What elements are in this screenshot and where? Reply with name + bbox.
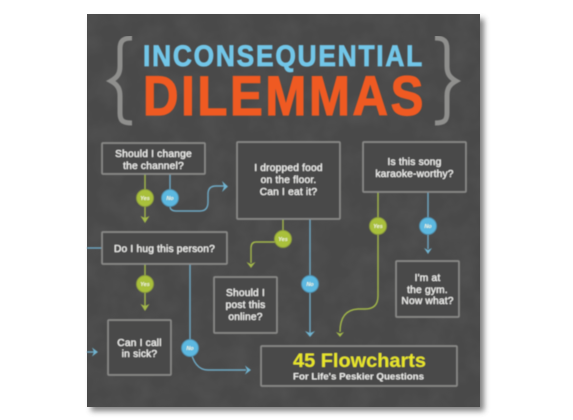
box: 45 flowcharts: For Life's Peskier Questions (293, 372, 424, 382)
box: dropped food (237, 142, 340, 219)
box: change the channel: Should I change (115, 149, 192, 160)
badge: yes, channel: Yes (140, 196, 150, 202)
drop shadow (91, 19, 484, 411)
arrow: dropped no to flowcharts (305, 219, 315, 337)
arrow: incoming to call in sick (87, 348, 98, 356)
box: dropped food: I dropped food (254, 163, 323, 174)
badge: no, channel (162, 190, 178, 206)
arrow: channel yes to hug (140, 174, 150, 223)
badge: no, dropped food: No (306, 282, 314, 288)
left curly brace (111, 38, 132, 123)
arrow: incoming to hug (87, 247, 102, 249)
box: dropped food: on the floor. (261, 175, 316, 186)
flowchart (87, 142, 466, 386)
arrow: hug no to flowcharts (190, 264, 251, 374)
badge: yes, dropped food (274, 230, 292, 248)
badge: yes, karaoke: Yes (373, 224, 383, 230)
box: change the channel (102, 143, 205, 174)
box: change the channel: the channel? (123, 161, 184, 172)
right curly brace (435, 38, 456, 123)
badge: yes, karaoke (370, 218, 386, 234)
title: inconsequential: INCONSEQUENTIAL (143, 40, 424, 73)
box: gym: Now what? (401, 296, 454, 307)
box: post online: Should I (226, 288, 265, 299)
title block (111, 38, 456, 127)
box: post online (214, 277, 277, 333)
chalkboard background (87, 14, 480, 407)
box: call in sick: in sick? (122, 349, 157, 360)
box: post online: online? (228, 312, 263, 323)
box: call in sick: Can I call (117, 338, 162, 349)
badge: no, karaoke: No (424, 224, 432, 230)
arrow: channel no to dropped food (170, 174, 228, 211)
box: karaoke (363, 142, 466, 192)
title: dilemmas: DILEMMAS (143, 64, 426, 127)
badge: no, channel: No (166, 196, 174, 202)
arrow: karaoke no to gym (424, 192, 432, 254)
box: hug: Do I hug this person? (114, 244, 215, 255)
arrow: dropped yes to post online (246, 219, 283, 268)
badge: no, hug: No (186, 346, 194, 352)
badge: no, karaoke (420, 218, 436, 234)
box: 45 flowcharts: 45 Flowcharts (293, 350, 426, 372)
box: hug (102, 232, 227, 264)
box: karaoke: Is this song (388, 157, 442, 168)
box: gym (396, 261, 459, 317)
box: dropped food: Can I eat it? (260, 187, 317, 198)
badge: yes, hug: Yes (140, 282, 150, 288)
arrow: karaoke yes to flowcharts (336, 192, 378, 337)
box: post online: post this (226, 300, 265, 311)
arrow: hug yes to call in sick (140, 264, 150, 311)
box: gym: the gym. (407, 285, 448, 296)
badge: no, dropped food (302, 276, 318, 292)
badge: no, hug (182, 340, 198, 356)
badge: yes, hug (136, 276, 154, 292)
box: gym: I'm at (415, 273, 440, 284)
badge: yes, channel (136, 190, 154, 206)
box: karaoke: karaoke-worthy? (375, 169, 454, 180)
badge: yes, dropped food: Yes (278, 237, 288, 243)
box: call in sick (108, 320, 171, 375)
box: 45 flowcharts (261, 346, 457, 386)
